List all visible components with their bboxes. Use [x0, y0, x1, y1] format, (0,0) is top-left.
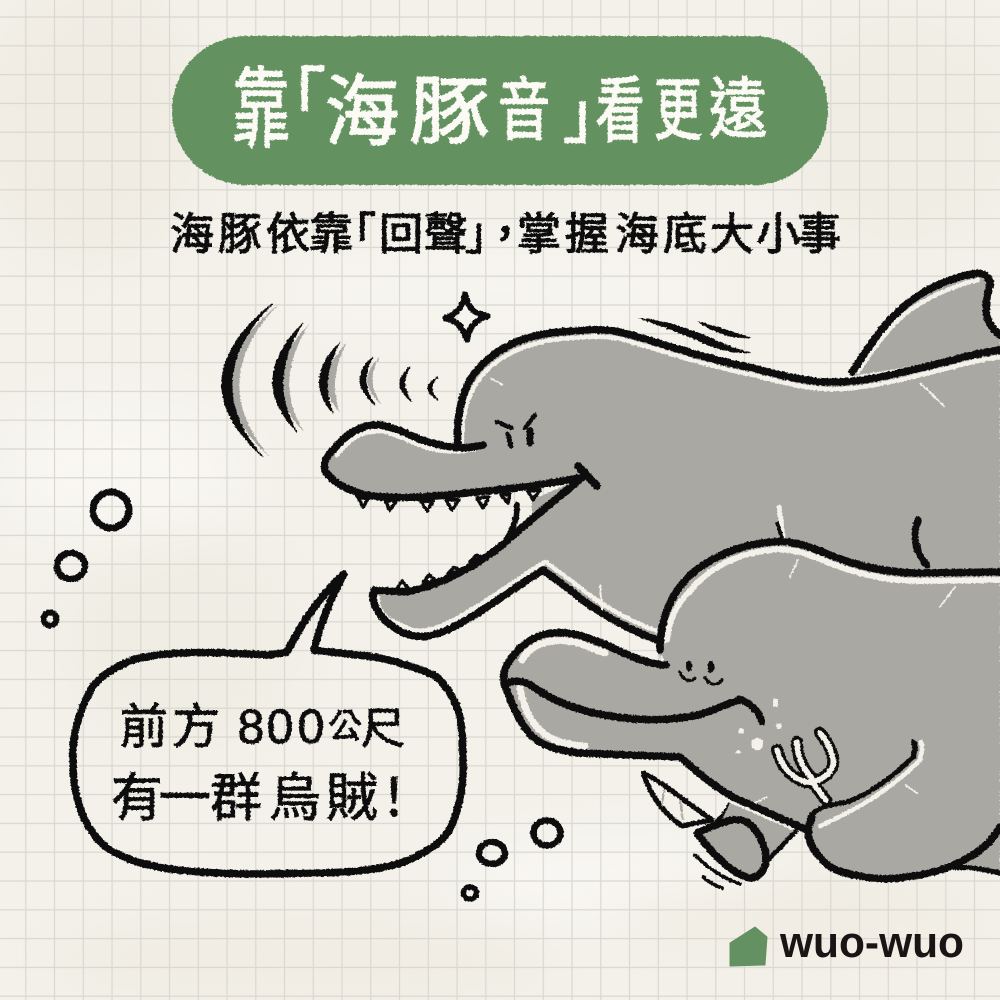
icon: sparkle star — [445, 294, 488, 340]
speech bubble — [73, 574, 463, 874]
bubble text line 1: 800 — [238, 701, 324, 754]
icon: knife — [643, 773, 730, 826]
inner highlight — [337, 337, 1000, 633]
smiling eyes — [680, 660, 722, 684]
mouth interior — [532, 483, 570, 522]
flipper holding knife — [695, 803, 797, 888]
dorsal fin — [852, 273, 1000, 376]
inner highlight — [520, 549, 1000, 826]
bubble text line 1: 前方 — [120, 701, 220, 754]
title banner — [172, 36, 828, 185]
title text — [232, 61, 767, 159]
bubbles left — [44, 492, 129, 626]
upper dolphin — [324, 273, 1000, 660]
body ticks — [490, 378, 945, 610]
outlines — [324, 330, 1000, 640]
bubble text line 2: 有一群烏賊！ — [111, 770, 420, 828]
title text: 」 — [563, 82, 625, 151]
title text: 靠 — [232, 61, 290, 159]
bubble text line 1: 尺 — [361, 704, 405, 753]
bubbles lower right — [464, 820, 560, 899]
angry eyes — [497, 415, 535, 446]
title text: 更 — [654, 74, 702, 149]
upper teeth — [358, 490, 540, 511]
dolphin body fill — [503, 541, 1000, 879]
lower dolphin — [503, 541, 1000, 888]
title text: 「 — [258, 63, 326, 139]
motion lines above the back — [638, 318, 752, 353]
title text: 遠 — [709, 74, 767, 147]
outlines — [503, 541, 1000, 879]
cheek dots — [735, 698, 782, 754]
icon: fork — [777, 733, 833, 800]
icon: logo house — [730, 927, 767, 966]
icon: sound waves — [222, 303, 438, 457]
bubble text line 1: 公 — [328, 708, 362, 746]
logo wordmark: wuo-wuo — [779, 918, 964, 967]
title text: 海 — [325, 70, 399, 156]
title text: 豚 — [409, 71, 491, 153]
title text: 看 — [596, 72, 644, 152]
subtitle: 海豚依靠「回聲」，掌握海底大小事 — [170, 210, 841, 259]
lower teeth — [396, 555, 482, 590]
dolphin body fill — [324, 330, 1000, 660]
title text: 音 — [498, 72, 550, 149]
